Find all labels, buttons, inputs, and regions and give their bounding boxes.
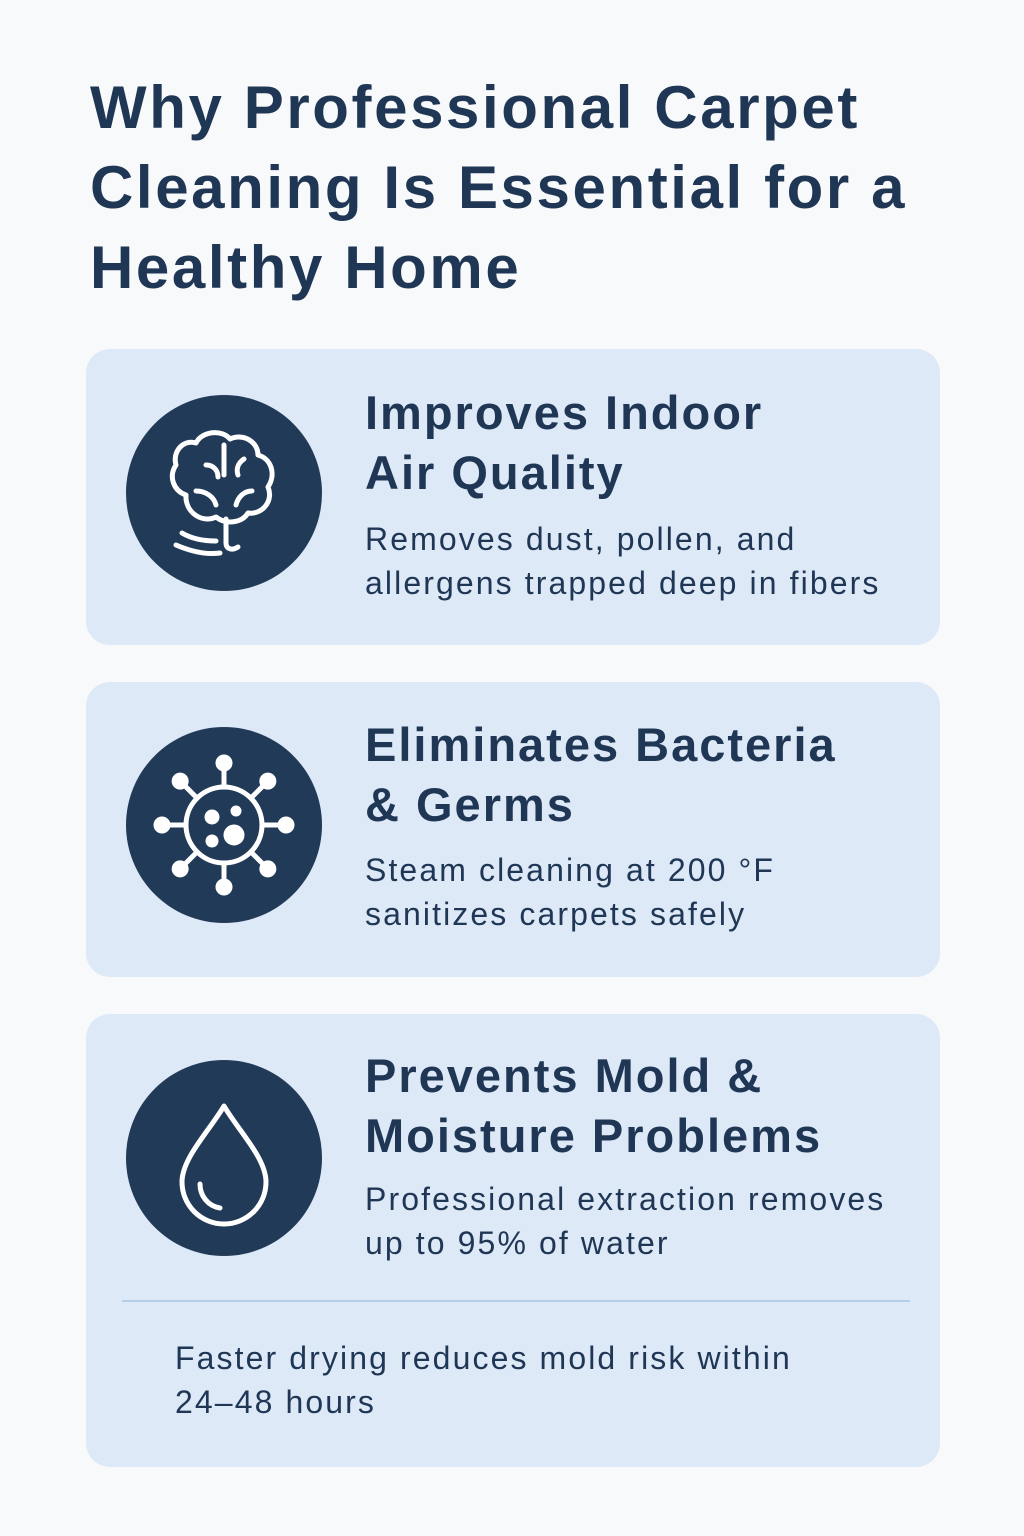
heading (365, 1049, 822, 1162)
panel: air quality (86, 349, 940, 645)
heading (365, 718, 837, 831)
heading: & Germs (365, 778, 575, 831)
heading (365, 386, 763, 499)
text: Removes dust, pollen, and (365, 521, 796, 557)
heading: Prevents Mold & (365, 1049, 763, 1102)
footer note: 24–48 hours (175, 1384, 376, 1420)
footer note (175, 1340, 792, 1420)
title: Cleaning Is Essential for a (90, 154, 907, 221)
text: up to 95% of water (365, 1225, 670, 1261)
text: allergens trapped deep in fibers (365, 565, 880, 601)
text: Professional extraction removes (365, 1181, 885, 1217)
text (365, 852, 775, 932)
heading: Air Quality (365, 446, 625, 499)
text: sanitizes carpets safely (365, 896, 746, 932)
footer note: Faster drying reduces mold risk within (175, 1340, 792, 1376)
heading: Moisture Problems (365, 1109, 822, 1162)
panel: bacteria (86, 682, 940, 977)
icon: brain (126, 395, 322, 591)
title (90, 74, 907, 301)
icon: germ (126, 727, 322, 923)
heading: Improves Indoor (365, 386, 763, 439)
text (365, 1181, 885, 1261)
text (365, 521, 880, 601)
icon: water drop (126, 1060, 322, 1256)
panel: mold (86, 1014, 940, 1467)
heading: Eliminates Bacteria (365, 718, 837, 771)
text: Steam cleaning at 200 °F (365, 852, 775, 888)
title: Healthy Home (90, 234, 521, 301)
title: Why Professional Carpet (90, 74, 860, 141)
